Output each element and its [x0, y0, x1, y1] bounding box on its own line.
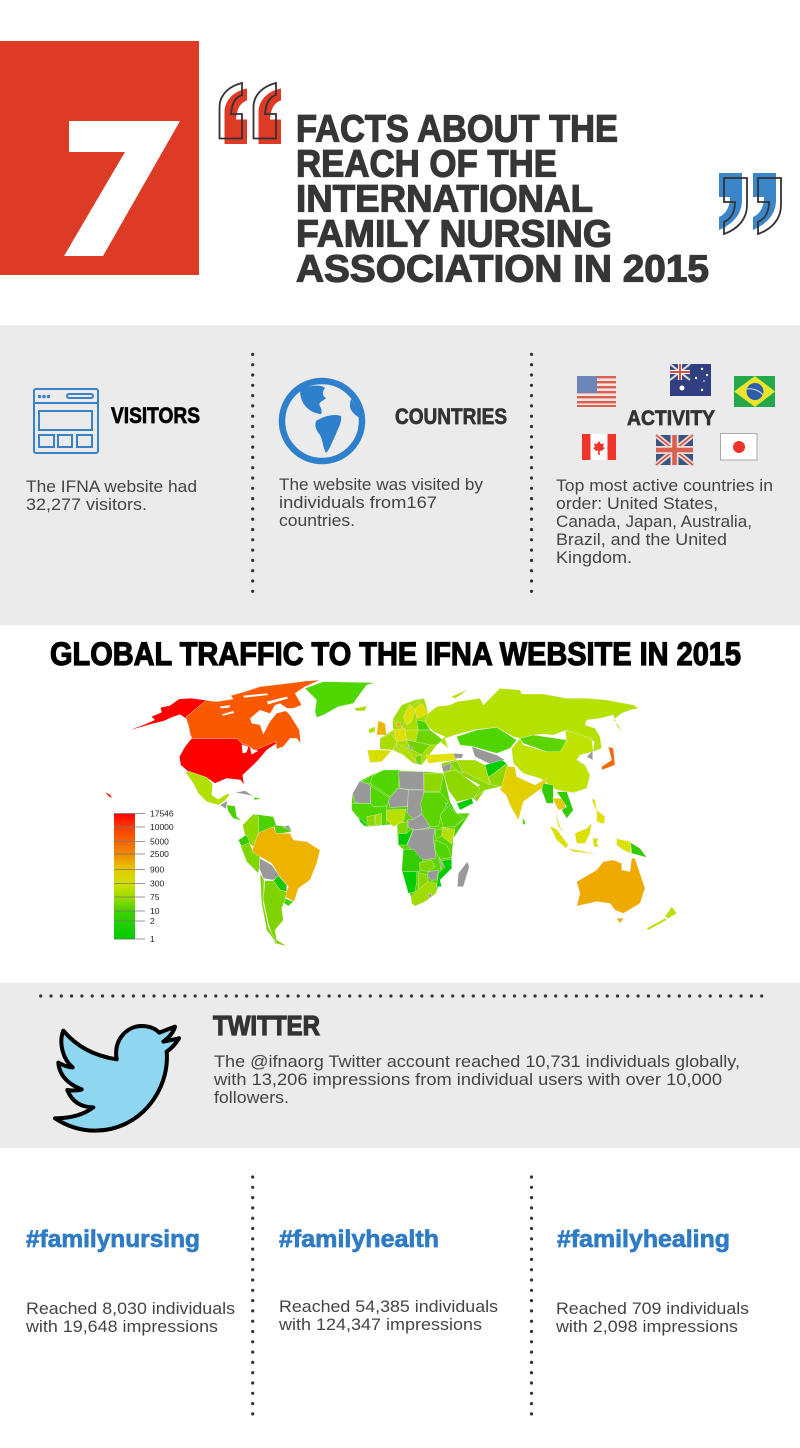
text: Twitter reach	[213, 1052, 740, 1107]
icon: globe	[282, 381, 362, 461]
numeral 7	[64, 121, 180, 256]
text: activity: Brazil, and the United	[556, 530, 727, 549]
map: Asia and Oceania	[425, 688, 677, 930]
heading: visitors: VISITORS	[111, 403, 200, 428]
panel: hashtags	[25, 1177, 749, 1416]
icon: flag Australia	[670, 364, 711, 396]
text: activity: Kingdom.	[556, 548, 632, 567]
chart: world traffic map	[105, 680, 677, 946]
legend: traffic colour scale: 10	[150, 906, 160, 916]
hashtag: familynursing: #familynursing	[26, 1226, 200, 1253]
title: FAMILY NURSING	[296, 214, 612, 256]
title: ASSOCIATION IN 2015	[296, 248, 709, 290]
hashtag: familyhealing	[555, 1226, 749, 1336]
hashtag: familynursing: with 19,648 impressions	[25, 1317, 218, 1336]
panel: website statistics	[0, 325, 800, 625]
icon: flag Japan	[720, 434, 757, 460]
icon: flag Canada	[582, 434, 616, 460]
icon: Twitter bird	[55, 1026, 179, 1131]
text: activity	[556, 476, 773, 567]
hashtag: familynursing	[25, 1226, 235, 1336]
title: REACH OF THE	[296, 144, 557, 186]
icon: closing quotation marks	[719, 173, 781, 234]
map: Africa	[352, 770, 470, 906]
legend: traffic colour scale: 17546	[150, 808, 174, 818]
legend: traffic colour scale	[114, 808, 174, 944]
text: visitors	[26, 477, 197, 514]
text: countries: The website was visited by	[279, 475, 484, 494]
heading: countries: COUNTRIES	[395, 404, 507, 429]
text: visitors: The IFNA website had	[26, 477, 197, 496]
hashtag: familyhealing: #familyhealing	[557, 1226, 730, 1253]
icon: flag United Kingdom	[656, 435, 693, 465]
legend: traffic colour scale: 5000	[150, 836, 169, 846]
hashtag: familyhealth: with 124,347 impressions	[278, 1315, 482, 1334]
hashtag: familyhealing: Reached 709 individuals	[556, 1299, 749, 1318]
text: Twitter reach: The @ifnaorg Twitter account reached 10,731 individuals globally,	[214, 1052, 740, 1071]
map: Latin America	[105, 682, 375, 946]
text: countries: individuals from167	[279, 493, 437, 512]
legend: traffic colour scale: 75	[150, 892, 160, 902]
title: FACTS ABOUT THE	[296, 108, 618, 150]
hashtag: familynursing: Reached 8,030 individuals	[26, 1299, 235, 1318]
icon: opening quotation marks	[220, 83, 281, 144]
panel: Twitter	[0, 983, 800, 1148]
text: Twitter reach: followers.	[214, 1088, 289, 1107]
legend: traffic colour scale: 2	[150, 916, 155, 926]
text: activity: Top most active countries in	[556, 476, 773, 495]
heading: Twitter: TWITTER	[213, 1010, 320, 1041]
panel: red number block	[0, 41, 199, 275]
legend: traffic colour scale: 300	[150, 878, 164, 888]
legend: traffic colour scale: 2500	[150, 849, 169, 859]
icon: flag United States	[577, 376, 616, 407]
hashtag: familyhealing: with 2,098 impressions	[555, 1317, 738, 1336]
title	[296, 108, 709, 290]
icon: flag Brazil	[734, 376, 775, 407]
hashtag: familyhealth	[278, 1226, 498, 1334]
text: Twitter reach: with 13,206 impressions from individual users with over 10,000	[213, 1070, 722, 1089]
text: countries: countries.	[279, 511, 355, 530]
hashtag: familyhealth: #familyhealth	[279, 1226, 439, 1253]
heading: global traffic: GLOBAL TRAFFIC TO THE IFNA WEBSITE IN 2015	[50, 636, 741, 672]
legend: traffic colour scale: 1	[150, 934, 155, 944]
hashtag: familyhealth: Reached 54,385 individuals	[279, 1297, 498, 1316]
icon: browser window	[34, 389, 98, 453]
map: Europe	[354, 698, 457, 765]
title: INTERNATIONAL	[296, 178, 593, 220]
legend: traffic colour scale: 10000	[150, 822, 174, 832]
text: activity: Canada, Japan, Australia,	[556, 512, 752, 531]
map: North America	[130, 680, 320, 785]
text: activity: order: United States,	[556, 494, 718, 513]
text: visitors: 32,277 visitors.	[26, 495, 147, 514]
legend: traffic colour scale: 900	[150, 864, 164, 874]
heading: activity: ACTIVITY	[627, 407, 715, 430]
text: countries	[279, 475, 484, 530]
